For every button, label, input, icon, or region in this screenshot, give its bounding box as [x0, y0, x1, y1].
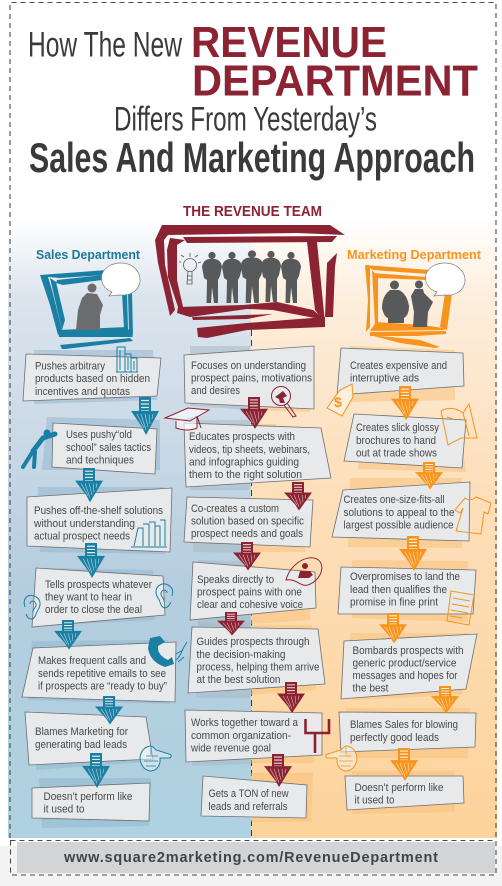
step: one-size-fits-all: solutions to appeal to the [344, 507, 454, 519]
title [28, 18, 478, 181]
step: co-creates [184, 497, 313, 553]
step: speaks directly: Speaks directly to [197, 574, 274, 586]
icon: books [131, 520, 167, 547]
step: overpromises: promise in fine print [350, 596, 439, 608]
step: pushes off-the-shelf: actual prospect needs [34, 530, 130, 542]
step: gets a ton: Gets a TON of new [208, 788, 289, 800]
panel: revenue column [165, 346, 331, 822]
step: educates: Educates prospects with [189, 431, 295, 443]
icon: ear left [24, 595, 40, 619]
arrows: marketing [379, 386, 459, 781]
step: pushes arbitrary: Pushes arbitrary [35, 360, 105, 372]
speech bubble [101, 263, 140, 296]
silhouette: person on phone [76, 284, 103, 330]
step: pushes arbitrary [23, 350, 161, 404]
center dashed divider [250, 330, 252, 838]
title: How The New [28, 26, 183, 64]
icon: pointing hand blue [140, 746, 171, 771]
icon: person pushing [23, 430, 55, 467]
step: blames sales [339, 708, 476, 758]
speech bubble [425, 263, 465, 296]
heading: the revenue team: THE REVENUE TEAM [183, 203, 322, 220]
step: educates: and infographics guiding [189, 456, 299, 468]
step: educates: videos, tip sheets, webinars, [189, 444, 310, 456]
step: tells prospects: Tells prospects whatever [45, 579, 152, 591]
step: educates [184, 420, 331, 490]
panel: sales column [22, 347, 187, 828]
step: bombards: messages and hopes for [352, 670, 458, 682]
step: guides [188, 622, 325, 698]
step: works together: common organization- [191, 730, 291, 742]
title: Differs From Yesterday’s [114, 100, 377, 138]
step: co-creates: prospect needs and goals [191, 528, 303, 540]
step: doesn't perform sales: it used to [44, 804, 84, 816]
step: expensive ads: Creates expensive and [350, 360, 447, 372]
step: doesn't perform marketing [345, 771, 464, 814]
step: speaks directly [190, 560, 316, 626]
step: blames sales: perfectly good leads [350, 732, 439, 744]
step: blames sales: Blames Sales for blowing [350, 719, 458, 731]
step: focuses: Focuses on understanding [191, 360, 306, 372]
step: overpromises [338, 560, 476, 622]
step: pushes arbitrary: incentives and quotas [35, 386, 130, 398]
footer url bar [10, 840, 496, 875]
footer url bar: www.square2marketing.com/RevenueDepartment [63, 850, 438, 866]
heading: sales department: Sales Department [36, 247, 141, 262]
step: expensive ads [337, 346, 464, 402]
icon: t-shirt [455, 497, 491, 534]
step: works together: Works together toward a [191, 717, 299, 729]
step: slick glossy: Creates slick glossy [356, 422, 439, 434]
step: doesn't perform marketing: it used to [354, 794, 394, 806]
step: tells prospects: order to close the deal [45, 604, 142, 616]
icon: telephone [148, 636, 187, 667]
step: makes frequent calls: sends repetitive emails to see [38, 668, 166, 680]
step: makes frequent calls: if prospects are “ready to buy” [38, 680, 167, 692]
step: expensive ads: interruptive ads [350, 372, 419, 384]
step: educates: them to the right solution [189, 469, 302, 481]
step: bombards [341, 633, 477, 700]
step: pushes off-the-shelf: Pushes off-the-shelf solutions [34, 505, 163, 517]
step: guides: process, helping them arrive [196, 662, 320, 674]
step: overpromises: lead then qualifies the [350, 584, 447, 596]
step: guides: Guides prospects through [196, 636, 310, 648]
icon: goal post [306, 719, 329, 753]
step: slick glossy [344, 414, 466, 472]
sales frame with silhouette [40, 263, 140, 349]
step: doesn't perform sales: Doesn’t perform like [44, 791, 132, 803]
icon: open book [441, 404, 477, 445]
silhouettes: revenue team [202, 250, 301, 303]
step: guides: at the best solution [196, 674, 280, 686]
icon: talking head [286, 558, 322, 585]
step: works together: wide revenue goal [190, 742, 271, 754]
step: pushes off-the-shelf [27, 487, 172, 554]
step: makes frequent calls [22, 640, 176, 704]
arrows: revenue [217, 397, 312, 787]
step: blames marketing: Blames Marketing for [35, 726, 128, 738]
step: speaks directly: clear and cohesive voice [197, 599, 303, 611]
step: makes frequent calls: Makes frequent calls and [38, 655, 146, 667]
step: one-size-fits-all: largest possible audience [344, 520, 454, 532]
step: one-size-fits-all [332, 478, 470, 548]
icon: pointing hand orange [326, 746, 357, 771]
step: tells prospects [32, 568, 165, 627]
step: overpromises: Overpromises to land the [350, 571, 460, 583]
icon: ear right [156, 584, 173, 608]
icon: bar chart [116, 347, 138, 372]
icon: fine print paper [447, 591, 474, 625]
step: uses pushy: and techniques [66, 454, 134, 466]
step: co-creates: Co-creates a custom [191, 503, 279, 515]
step: blames marketing: generating bad leads [35, 739, 127, 751]
step: doesn't perform sales [32, 778, 151, 828]
step: guides: the decision-making [196, 649, 286, 661]
step: focuses: prospect pains, motivations [191, 372, 312, 384]
step: pushes off-the-shelf: without understanding [33, 518, 135, 530]
panel: marketing side background [251, 218, 497, 838]
step: gets a ton: leads and referrals [208, 801, 288, 813]
silhouettes: two men [382, 280, 433, 327]
step: works together [185, 710, 322, 766]
marketing frame with silhouettes [365, 263, 465, 348]
step: blames marketing [25, 712, 153, 770]
step: uses pushy [42, 417, 160, 474]
step: slick glossy: out at trade shows [356, 448, 437, 460]
step: bombards: Bombards prospects with [352, 645, 464, 657]
panel: sales side background [8, 218, 251, 838]
arrows: sales [54, 397, 159, 788]
icon: price tag [327, 384, 353, 416]
icon: magnifier [272, 386, 296, 417]
step: one-size-fits-all: Creates one-size-fits-all [344, 494, 444, 506]
step: tells prospects: they want to hear in [45, 592, 132, 604]
step: bombards: generic product/service [352, 658, 456, 670]
heading: marketing department: Marketing Department [347, 247, 482, 262]
step: pushes arbitrary: products based on hidden [35, 373, 150, 385]
step: focuses [184, 346, 314, 412]
step: focuses: and desires [191, 385, 240, 397]
step: co-creates: solution based on specific [191, 516, 304, 528]
step: speaks directly: prospect pains with one [197, 586, 302, 598]
title: REVENUE [191, 18, 387, 67]
icon: graduation cap [165, 408, 209, 430]
icon: price tag: $ [334, 394, 342, 410]
step: uses pushy: school” sales tactics [66, 442, 151, 454]
revenue team frame with silhouettes [155, 225, 345, 338]
step: uses pushy: Uses pushy“old [66, 429, 132, 441]
panel: marketing column [326, 346, 491, 814]
step: slick glossy: brochures to hand [356, 435, 436, 447]
step: doesn't perform marketing: Doesn’t perform like [354, 782, 444, 794]
icon: light bulb [179, 253, 201, 284]
title: DEPARTMENT [192, 56, 478, 106]
step: gets a ton [201, 773, 313, 822]
step: bombards: the best [352, 682, 389, 694]
